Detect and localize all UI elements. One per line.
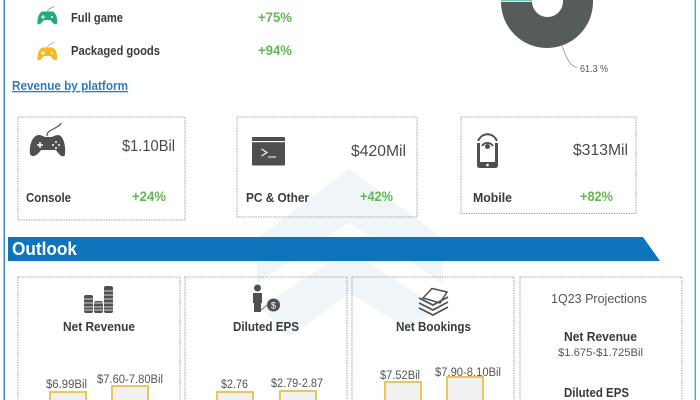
row: full game	[37, 6, 293, 25]
label: diluted eps: Diluted EPS	[233, 319, 299, 334]
value: prior eps: $2.76	[221, 379, 248, 391]
panel: net bookings	[352, 277, 514, 400]
panel: 1Q23 projections	[520, 277, 682, 400]
leader line	[562, 46, 577, 68]
label: projected net revenue: Net Revenue	[564, 329, 637, 344]
background watermark	[257, 169, 443, 337]
bar: prior net revenue	[50, 392, 86, 400]
value: console revenue: $1.10Bil	[122, 138, 175, 155]
icon: phone with signal	[477, 134, 498, 168]
bar: prior eps	[217, 392, 253, 400]
icon: green controller	[37, 6, 57, 24]
row: packaged goods	[37, 42, 293, 60]
panel: pc and other	[237, 117, 417, 217]
heading: 1Q23 projections: 1Q23 Projections	[551, 291, 647, 306]
panel: net revenue	[18, 277, 180, 400]
value: packaged goods growth: +94%	[258, 42, 293, 58]
value: console growth: +24%	[132, 188, 167, 204]
bar: projected net revenue	[112, 386, 148, 400]
icon: coin stacks	[84, 286, 113, 313]
icon: person with coin: $	[271, 300, 276, 310]
frame: right border	[694, 0, 696, 400]
donut chart	[501, 0, 608, 75]
label: mobile: Mobile	[473, 190, 512, 205]
bar: projected net bookings	[447, 377, 483, 400]
panel: diluted eps	[185, 277, 347, 400]
value: mobile revenue: $313Mil	[573, 142, 628, 159]
label: console: Console	[26, 190, 71, 205]
panel: mobile	[461, 117, 636, 214]
label: net bookings: Net Bookings	[396, 319, 471, 334]
label: pc and other: PC & Other	[246, 190, 309, 205]
value: pc revenue: $420Mil	[351, 143, 406, 160]
label: projected diluted eps: Diluted EPS	[564, 385, 629, 400]
icon: gamepad	[30, 123, 65, 156]
icon: yellow controller	[37, 42, 57, 60]
value: pc growth: +42%	[360, 188, 393, 204]
value: projected eps: $2.79-2.87	[271, 378, 323, 390]
bar: prior net bookings	[385, 382, 421, 400]
banner: outlook	[8, 237, 660, 261]
bar: projected eps	[280, 391, 316, 400]
icon: stacked papers	[419, 288, 448, 315]
value: projected net bookings: $7.90-8.10Bil	[435, 367, 501, 379]
value: mobile growth: +82%	[580, 188, 613, 204]
donut label: 61.3 %	[580, 64, 608, 75]
label: net revenue: Net Revenue	[63, 319, 135, 334]
icon: terminal window	[252, 137, 285, 166]
panel: console	[18, 117, 185, 220]
heading: outlook: Outlook	[12, 239, 78, 259]
value: prior net bookings: $7.52Bil	[380, 370, 420, 382]
value: projected net revenue range: $1.675-$1.725Bil	[558, 347, 643, 359]
heading: revenue by platform: Revenue by platform	[12, 78, 128, 93]
value: projected net revenue: $7.60-7.80Bil	[97, 374, 163, 386]
value: prior net revenue: $6.99Bil	[46, 379, 87, 391]
frame: left border	[4, 0, 5, 400]
value: full game growth: +75%	[258, 9, 293, 25]
icon: person with coin	[253, 284, 280, 312]
donut teal segment	[501, 0, 532, 1]
label: packaged goods: Packaged goods	[71, 43, 160, 58]
label: full game: Full game	[71, 10, 123, 25]
